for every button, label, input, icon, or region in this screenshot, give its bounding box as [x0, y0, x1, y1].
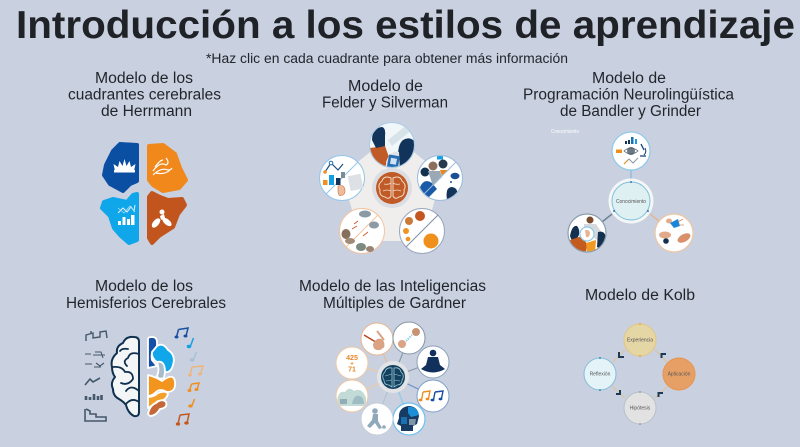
icon: four quadrant brain: [102, 144, 186, 243]
node: Hipótesis: Hipótesis: [630, 406, 651, 412]
heading: Felder: Modelo de: [348, 78, 423, 95]
icon: numbers: +: [350, 362, 354, 368]
icon: bottom right circle, dots: [400, 208, 444, 254]
panel: Felder and Silverman model: [320, 78, 462, 254]
heading: Gardner: Múltiples de Gardner: [323, 295, 466, 312]
icon: left circle, people with ear: [568, 214, 606, 252]
icon: line and bar chart: [118, 205, 135, 225]
heading: Felder: Felder y Silverman: [322, 94, 448, 112]
icon: music notes: [174, 328, 203, 426]
heading: Hemispheres: Hemisferios Cerebrales: [66, 295, 226, 312]
heading: Bandler and Grinder: de Bandler y Grinder: [560, 103, 701, 120]
heading: Kolb: Modelo de Kolb: [585, 287, 695, 304]
panel: Gardner model: [299, 278, 486, 435]
icon: left hemisphere symbols: [85, 331, 107, 421]
icon: top circle, eye and science: [612, 132, 650, 170]
heading: Gardner: [299, 278, 486, 312]
icon: left circle, chart and ear: [320, 156, 364, 200]
heading: Gardner: Modelo de las Inteligencias: [299, 278, 486, 295]
icon: hands touching: [393, 322, 425, 354]
icon: landscape: [336, 380, 368, 412]
node: Aplicación: Aplicación: [668, 372, 691, 378]
icon: central Conocimiento circle: [608, 178, 654, 224]
heading: Herrmann: Modelo de los: [95, 70, 193, 87]
icon: meditating person: [417, 346, 449, 378]
icon: hand writing: [361, 323, 393, 355]
icon: numbers: [336, 347, 368, 379]
heading: Herrmann: cuadrantes cerebrales: [68, 86, 221, 104]
panel: Hemispheres model: [66, 278, 226, 426]
connectors: [602, 170, 660, 222]
icon: right circle, group talking: [418, 156, 462, 200]
title: Introducción a los estilos de aprendizaje: [16, 4, 795, 47]
panel: Herrmann model: [68, 70, 221, 243]
icons: arrows: [616, 352, 666, 397]
icon: left brain outline: [112, 337, 139, 416]
icon: numbers: 71: [348, 366, 356, 374]
node: Experiencia: Experiencia: [627, 338, 653, 344]
heading: Hemispheres: [66, 278, 226, 312]
pentagon background: [342, 134, 442, 241]
icon: bottom left circle, hands: [340, 208, 384, 254]
icon: central Conocimiento circle: Conocimiento: [616, 199, 646, 205]
subtitle: *Haz clic en cada cuadrante para obtener más información: [206, 51, 568, 66]
panel: Kolb model: [584, 287, 695, 425]
icon: right circle, hands: [655, 214, 693, 252]
heading: Herrmann: [68, 70, 221, 120]
heading: Felder: [322, 78, 448, 112]
icon: top circle, people with document: [368, 122, 416, 170]
heading: Bandler and Grinder: Modelo de: [592, 70, 666, 87]
heading: Bandler and Grinder: Programación Neurolingüística: [523, 86, 734, 104]
icon: center brain: [372, 168, 412, 208]
icon: soccer player: [361, 403, 393, 435]
icon: crown symbol: [114, 159, 136, 172]
small label: Conocimiento: Conocimiento: [551, 129, 579, 135]
heading: Bandler and Grinder: [523, 70, 734, 120]
heading: Herrmann: de Herrmann: [101, 103, 192, 120]
panel: Bandler and Grinder model: [523, 70, 734, 252]
heading: Hemispheres: Modelo de los: [95, 278, 193, 295]
icon: body parts: [150, 210, 173, 229]
icon: music: [417, 380, 449, 412]
icon: head puzzle: [393, 403, 425, 435]
icon: numbers: 425: [346, 355, 358, 362]
icon: central brain: [377, 361, 409, 393]
connectors: [612, 350, 668, 398]
icon: right colored brain: [148, 337, 175, 416]
connectors: [352, 338, 433, 419]
node: Reflexión: Reflexión: [590, 372, 611, 378]
icon: flame waves: [153, 158, 172, 175]
